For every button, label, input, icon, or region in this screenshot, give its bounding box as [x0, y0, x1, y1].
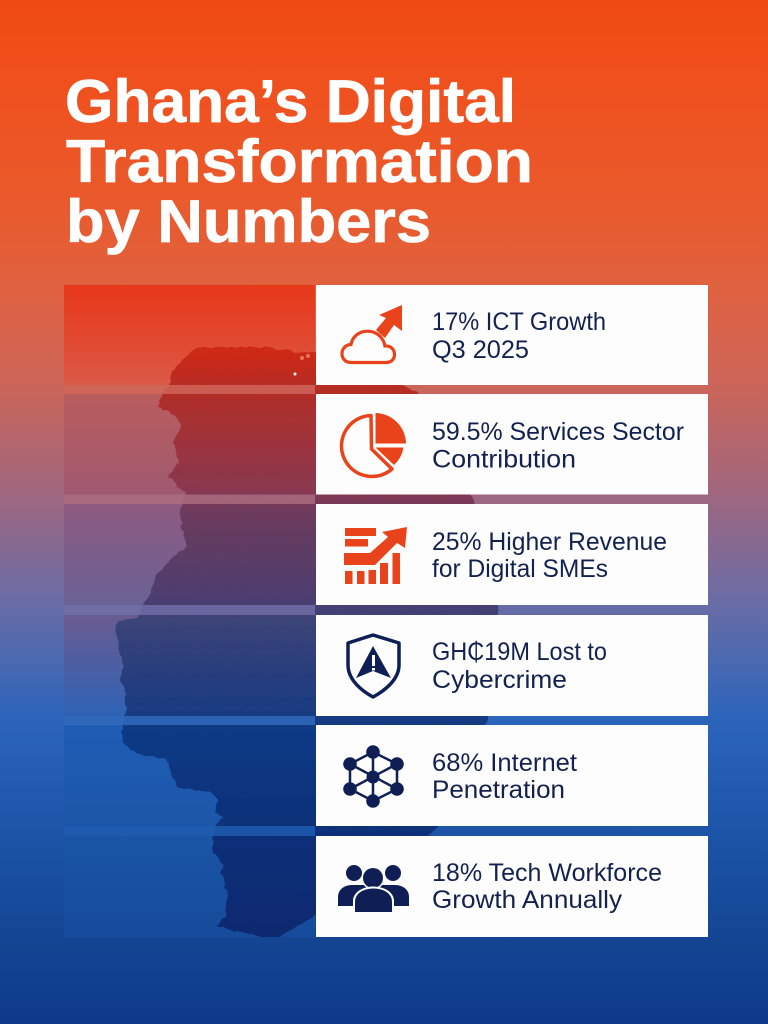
card 2: services sector: [316, 394, 708, 494]
text: internet penetration: [432, 749, 577, 804]
text: tech workforce: [432, 859, 662, 914]
map of Ghana silhouette: [115, 347, 498, 940]
text: services sector: Contribution: [432, 446, 576, 474]
text: SME revenue: [432, 528, 667, 583]
icon: rising bars and arrow: [344, 527, 407, 584]
text: cybercrime: Cybercrime: [432, 666, 567, 694]
icon: warning shield: [348, 635, 399, 697]
text: internet penetration: Penetration: [432, 776, 565, 804]
text: services sector: [432, 418, 684, 474]
text: ICT growth: Q3 2025: [432, 336, 529, 364]
icon: cloud with arrow: [342, 305, 402, 362]
card 3: SME revenue: [316, 504, 708, 605]
text: ICT growth: [432, 308, 606, 364]
text: SME revenue: 25% Higher Revenue: [432, 528, 667, 556]
icon: group of people: [338, 865, 409, 912]
card 4: cybercrime: [316, 615, 708, 716]
title: Transformation: [66, 128, 533, 195]
text: cybercrime: [432, 638, 607, 694]
card 1: ICT growth: [316, 285, 708, 385]
text: tech workforce: 18% Tech Workforce: [432, 859, 662, 887]
text: SME revenue: for Digital SMEs: [432, 555, 608, 583]
title: by Numbers: [66, 188, 431, 255]
text: cybercrime: GH₵19M Lost to: [432, 638, 607, 666]
title: [65, 68, 533, 255]
text: internet penetration: 68% Internet: [432, 749, 577, 777]
text: tech workforce: Growth Annually: [432, 886, 623, 914]
left striped panel backdrop: [64, 285, 315, 937]
text: services sector: 59.5% Services Sector: [432, 418, 684, 446]
card 6: tech workforce: [316, 836, 708, 937]
title: Ghana’s Digital: [65, 68, 516, 135]
card 5: internet penetration: [316, 725, 708, 826]
icon: network hexagon: [343, 745, 404, 808]
icon: pie chart: [341, 413, 406, 476]
text: ICT growth: 17% ICT Growth: [432, 308, 606, 336]
